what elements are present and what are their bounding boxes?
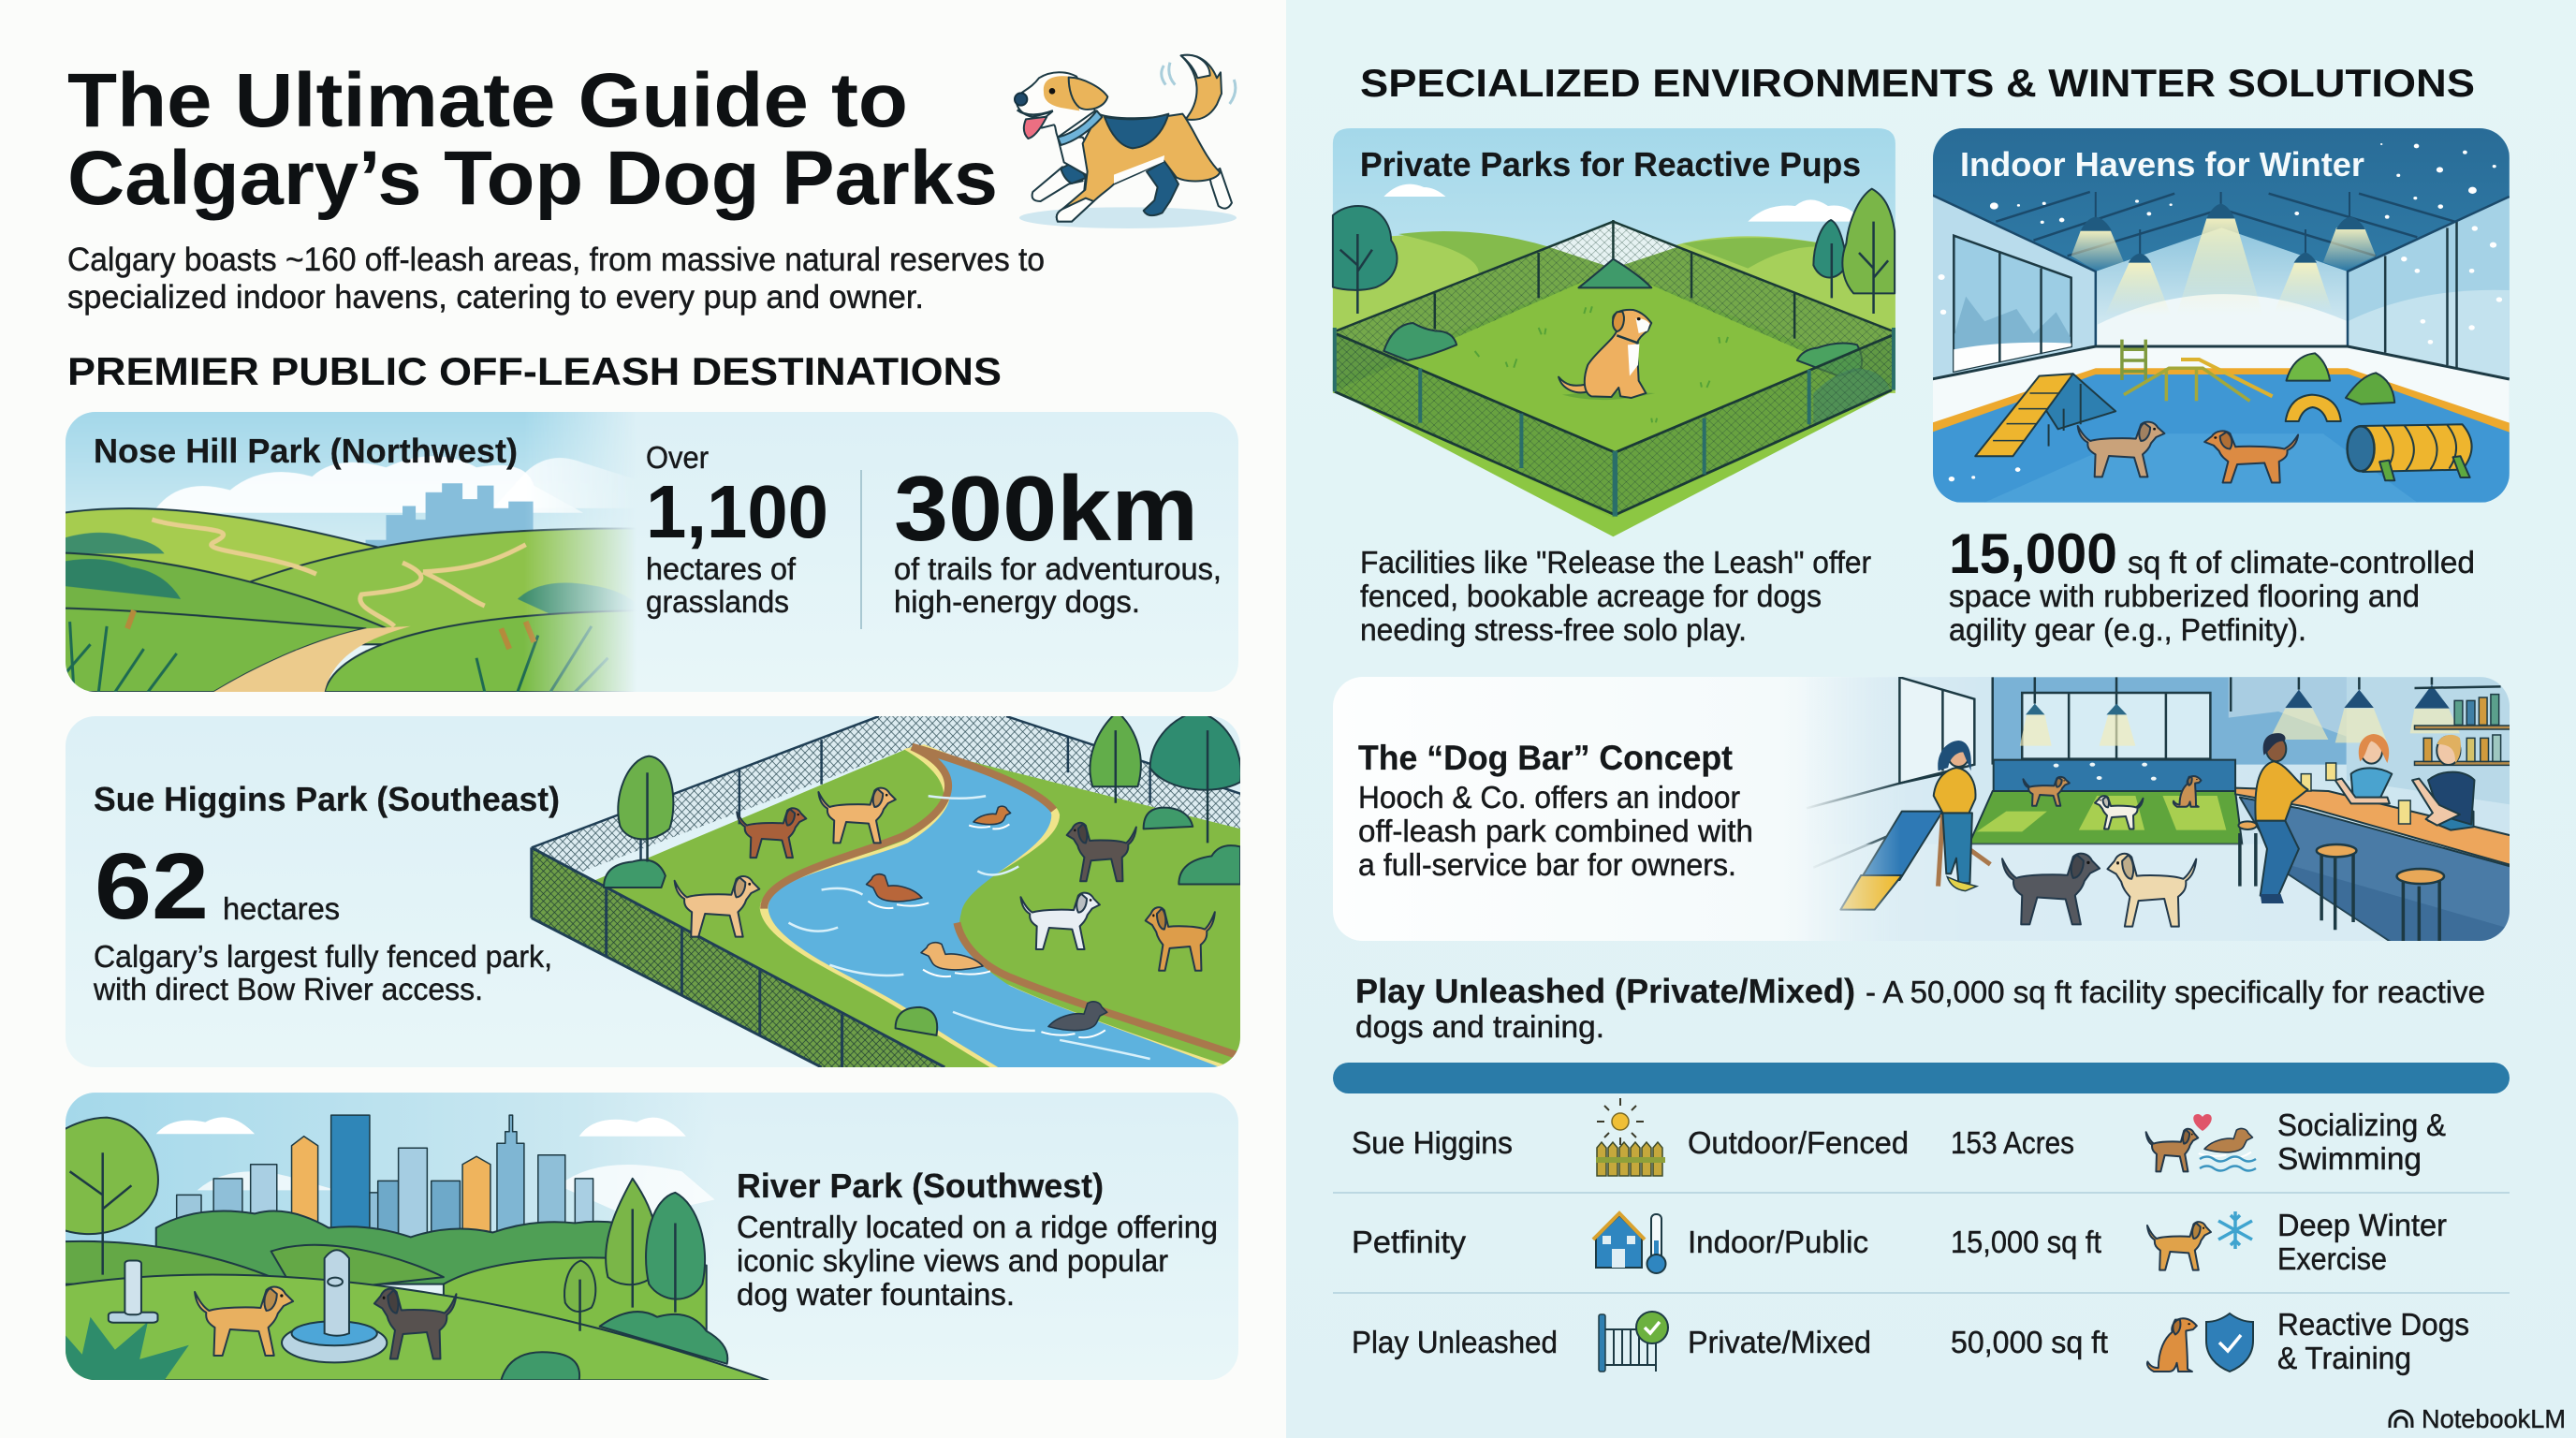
icon: dog and snowflake bbox=[2147, 1211, 2252, 1270]
illustration: fenced park and river bbox=[532, 712, 1241, 1067]
stat text: Sue Higgins: Calgary’s largest fully fenced park, bbox=[94, 939, 552, 974]
row: Petfinity: Exercise bbox=[2277, 1241, 2387, 1276]
stat text: Nose Hill bbox=[94, 432, 1222, 629]
illustration: skyline and fountains bbox=[57, 1093, 768, 1380]
dog sitting bbox=[1559, 310, 1655, 400]
stat text: Sue Higgins: 62 bbox=[95, 834, 209, 939]
row: Play Unleashed: Private/Mixed bbox=[1688, 1325, 1871, 1359]
stat text: Nose Hill: Over bbox=[646, 440, 709, 475]
row: Play Unleashed bbox=[1352, 1307, 2469, 1375]
row: Petfinity: Indoor/Public bbox=[1688, 1225, 1868, 1259]
stat text: Sue Higgins: with direct Bow River access. bbox=[93, 972, 483, 1006]
dogs playing bbox=[2078, 422, 2298, 483]
text: River Park bbox=[737, 1167, 1218, 1312]
stat text: Nose Hill: high-energy dogs. bbox=[894, 584, 1140, 619]
text: River Park: Centrally located on a ridge offering bbox=[737, 1210, 1218, 1244]
trees bbox=[1333, 189, 1895, 314]
description: Facilities like "Release the Leash" offer bbox=[1360, 545, 1871, 580]
description with stat: space with rubberized flooring and bbox=[1949, 579, 2420, 613]
panel: Dog Bar concept bbox=[1333, 677, 2514, 946]
text: Play Unleashed: dogs and training. bbox=[1355, 1009, 1604, 1044]
row: Sue Higgins: 153 Acres bbox=[1951, 1125, 2074, 1160]
text: River Park: dog water fountains. bbox=[737, 1277, 1015, 1312]
card title: Indoor Havens for Winter bbox=[1960, 145, 2364, 183]
intro text: specialized indoor havens, catering to every pup and owner. bbox=[67, 279, 924, 315]
icon: house and thermometer bbox=[1593, 1213, 1666, 1273]
heading: specialized environments: SPECIALIZED ENVIRONMENTS & WINTER SOLUTIONS bbox=[1360, 61, 2475, 105]
row: Petfinity bbox=[1352, 1208, 2447, 1276]
stat text: Nose Hill: 1,100 bbox=[646, 470, 828, 553]
description bbox=[1360, 545, 1871, 647]
text: Dog Bar bbox=[1358, 739, 1753, 882]
text: Dog Bar: a full-service bar for owners. bbox=[1358, 847, 1736, 882]
stat text: Sue Higgins: hectares bbox=[223, 891, 340, 926]
row: Petfinity: 15,000 sq ft bbox=[1951, 1225, 2101, 1259]
text: Play Unleashed: Play Unleashed (Private/Mixed) bbox=[1355, 972, 1855, 1010]
row: Petfinity: Petfinity bbox=[1352, 1225, 1467, 1259]
stat text: Sue Higgins bbox=[93, 780, 560, 1006]
panel: Indoor Havens bbox=[1932, 128, 2511, 647]
text: Play Unleashed: - A 50,000 sq ft facility specifically for reactive bbox=[1866, 975, 2485, 1009]
watermark: NotebookLM: NotebookLM bbox=[2422, 1404, 2566, 1433]
card title: Private Parks for Reactive Pups bbox=[1360, 145, 1861, 183]
description with stat: 15,000 bbox=[1949, 522, 2117, 585]
intro text: Calgary boasts ~160 off-leash areas, from massive natural reserves to bbox=[67, 242, 1045, 278]
background: left panel bbox=[0, 0, 1288, 1438]
stat text: Nose Hill: hectares of bbox=[646, 551, 797, 586]
description with stat bbox=[1949, 522, 2475, 647]
description with stat: sq ft of climate-controlled bbox=[2128, 545, 2475, 580]
text: Dog Bar: Hooch & Co. offers an indoor bbox=[1358, 780, 1740, 814]
description: fenced, bookable acreage for dogs bbox=[1360, 579, 1822, 613]
row: Sue Higgins bbox=[1352, 1098, 2446, 1176]
illustration: rolling hills bbox=[66, 412, 633, 692]
icon: dogs, heart and waves bbox=[2146, 1114, 2256, 1171]
row: Sue Higgins: Swimming bbox=[2277, 1141, 2422, 1176]
row: Petfinity: Deep Winter bbox=[2277, 1208, 2447, 1242]
illustration: dog bar interior bbox=[1797, 677, 2514, 946]
panel: Sue Higgins Park bbox=[66, 712, 1241, 1067]
row: Play Unleashed: 50,000 sq ft bbox=[1951, 1325, 2108, 1359]
stat text: Nose Hill: grasslands bbox=[646, 584, 789, 619]
stat text: Nose Hill: 300km bbox=[894, 457, 1198, 560]
title bbox=[67, 58, 998, 221]
dogs in the bar bbox=[2002, 776, 2202, 927]
description: needing stress-free solo play. bbox=[1360, 612, 1747, 647]
table header bar bbox=[1333, 1063, 2510, 1093]
text: Dog Bar: off-leash park combined with bbox=[1358, 814, 1753, 848]
intro text bbox=[67, 242, 1045, 315]
text: River Park: iconic skyline views and popular bbox=[737, 1243, 1168, 1278]
title: Calgary’s Top Dog Parks bbox=[67, 136, 998, 221]
icon: sun and fence bbox=[1596, 1098, 1665, 1176]
illustration: indoor agility hall bbox=[1932, 128, 2511, 503]
background: right panel bbox=[1286, 0, 2576, 1438]
row: Sue Higgins: Socializing & bbox=[2277, 1108, 2446, 1142]
text: River Park: River Park (Southwest) bbox=[737, 1167, 1104, 1205]
stat text: Nose Hill: of trails for adventurous, bbox=[894, 551, 1222, 586]
text: Play Unleashed bbox=[1355, 972, 2485, 1044]
row: Play Unleashed: & Training bbox=[2277, 1341, 2411, 1375]
icon: gate and check bbox=[1599, 1312, 1668, 1372]
row: Play Unleashed: Play Unleashed bbox=[1352, 1325, 1558, 1359]
row: Play Unleashed: Reactive Dogs bbox=[2277, 1307, 2469, 1342]
title: The Ultimate Guide to bbox=[67, 58, 908, 143]
dogs bbox=[675, 788, 1215, 1037]
text: Dog Bar: The “Dog Bar” Concept bbox=[1358, 739, 1733, 777]
icon: sitting dog and shield bbox=[2147, 1313, 2253, 1372]
description with stat: agility gear (e.g., Petfinity). bbox=[1949, 612, 2306, 647]
row: Sue Higgins: Outdoor/Fenced bbox=[1688, 1125, 1909, 1160]
heading: premier public destinations: PREMIER PUBLIC OFF-LEASH DESTINATIONS bbox=[67, 349, 1002, 393]
panel: Private Parks bbox=[1333, 128, 1895, 647]
illustration: private fenced park bbox=[1333, 128, 1895, 536]
table: comparison bbox=[1333, 1098, 2510, 1375]
dogs at fountain bbox=[195, 1287, 456, 1359]
panel: River Park bbox=[57, 1093, 1238, 1380]
stat text: Nose Hill: Nose Hill Park (Northwest) bbox=[94, 432, 518, 470]
row: Sue Higgins: Sue Higgins bbox=[1352, 1125, 1513, 1160]
stat text: Sue Higgins: Sue Higgins Park (Southeast) bbox=[94, 780, 560, 818]
icon: hero dog bbox=[1015, 55, 1237, 228]
panel: Nose Hill Park bbox=[50, 299, 1238, 692]
